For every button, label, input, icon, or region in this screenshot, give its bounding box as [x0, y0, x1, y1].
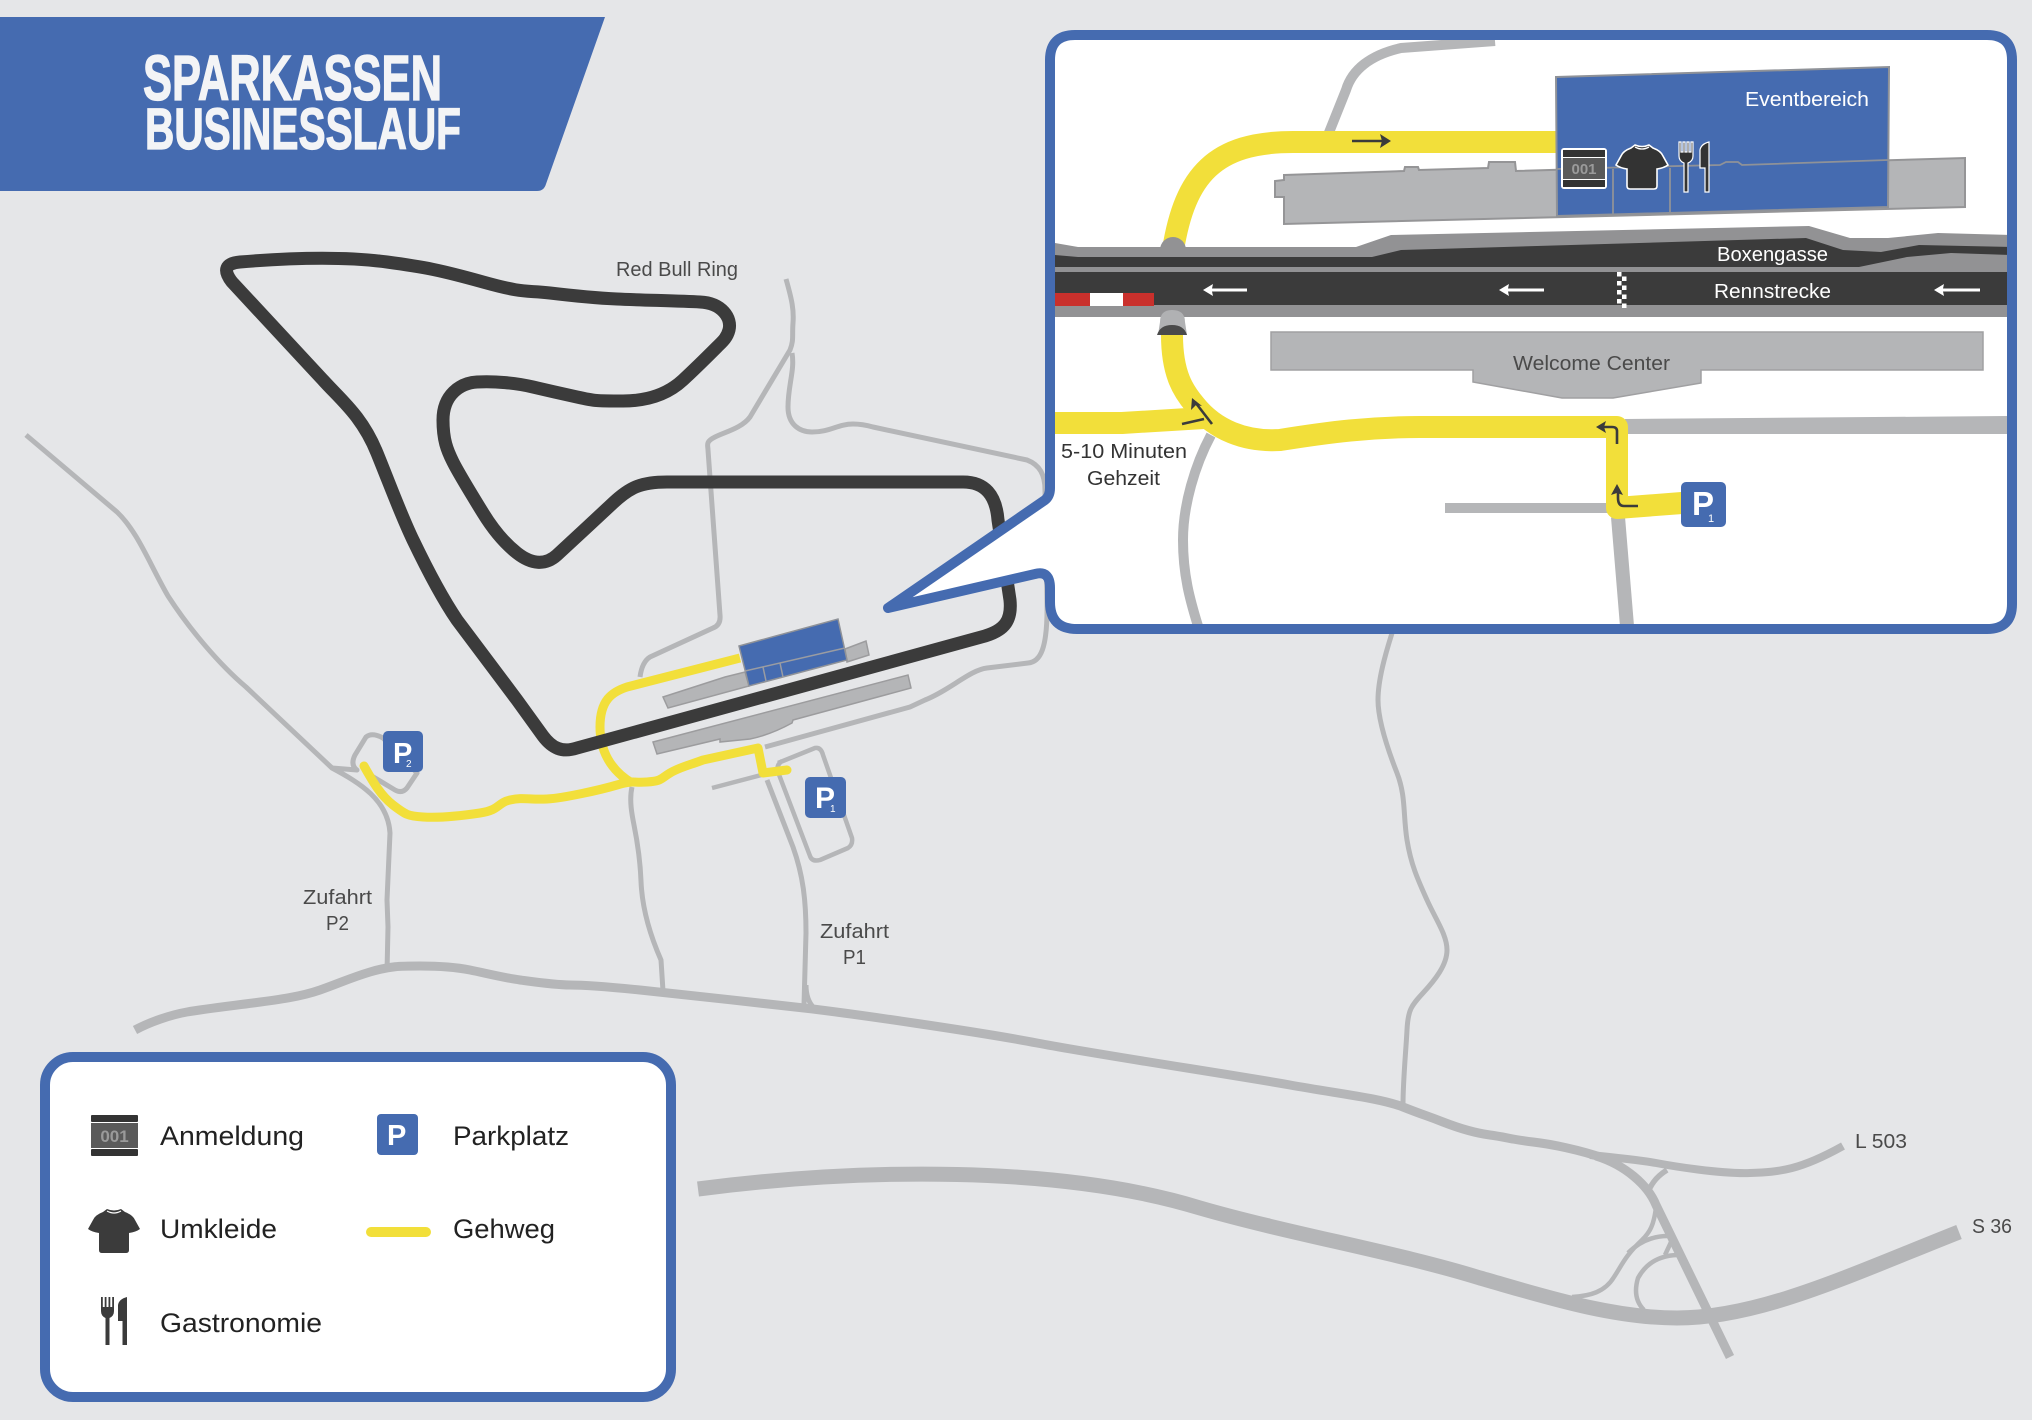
buildings overview [653, 619, 911, 754]
parking icon P1: P [815, 782, 835, 815]
walking time note: 5-10 Minuten [1061, 441, 1187, 463]
map labels [303, 259, 2012, 1238]
event area overview [739, 619, 847, 686]
legend label: Umkleide: Umkleide [160, 1214, 277, 1244]
map labels: P2 [326, 913, 349, 935]
legend icon: shirt [88, 1209, 140, 1253]
grey pavilion building [1275, 158, 1965, 224]
tunnel entrance [1157, 237, 1187, 335]
walkway to event area [1173, 142, 1556, 250]
map labels: S 36 [1972, 1216, 2012, 1238]
legend icon: walkway line [366, 1227, 431, 1237]
race track strip: Rennstrecke [1714, 281, 1831, 303]
parking icon P2: 2 [406, 759, 412, 770]
white direction arrows [1203, 284, 1980, 296]
title banner: SPARKASSEN [143, 42, 442, 114]
inset detail panel with callout pointer [888, 35, 2012, 629]
walking time note: Gehzeit [1087, 468, 1160, 490]
map labels: Red Bull Ring [616, 259, 738, 281]
map labels: L 503 [1855, 1131, 1907, 1153]
legend label: Anmeldung: Anmeldung [160, 1121, 304, 1151]
parking icon P2: P [393, 738, 412, 770]
welcome center building [1271, 332, 1983, 398]
event area [1556, 67, 1889, 216]
legend icon: parking [377, 1114, 418, 1155]
legend label: Gehweg: Gehweg [453, 1214, 555, 1244]
pit lane: Boxengasse [1717, 244, 1828, 266]
welcome center building: Welcome Center [1513, 353, 1670, 375]
title banner: BUSINESSLAUF [145, 97, 461, 162]
walking time note [1062, 443, 1186, 485]
race track strip [1055, 272, 2010, 317]
footpath overview [364, 658, 787, 817]
icon: cutlery [1679, 142, 1709, 192]
parking icon inset [1681, 482, 1726, 527]
parking icon inset: P [1692, 485, 1714, 522]
legend icon: registration bib [91, 1115, 138, 1156]
event area: Eventbereich [1745, 89, 1869, 111]
parking icon P1: 1 [830, 804, 836, 815]
icon: registration bib: 001 [1571, 161, 1597, 178]
race track: Red Bull Ring [227, 258, 1010, 750]
footpath to parking P1 [1055, 335, 1682, 508]
inset roads [1183, 41, 2010, 626]
parking icon P2 [383, 731, 423, 772]
road network [26, 279, 1959, 1357]
icon: shirt [1616, 145, 1668, 189]
legend label: Gastronomie: Gastronomie [160, 1308, 322, 1338]
pit lane [1055, 226, 2010, 274]
title banner [0, 17, 605, 191]
map labels: Zufahrt [303, 887, 372, 909]
legend label: Parkplatz: Parkplatz [453, 1121, 569, 1151]
map labels: P1 [843, 947, 866, 969]
legend icon: registration bib: 001 [100, 1127, 129, 1146]
parking icon P1 [805, 777, 846, 818]
map labels: Zufahrt [820, 921, 889, 943]
icon: registration bib [1561, 148, 1607, 189]
dark route arrows [1182, 134, 1638, 506]
legend icon: cutlery [101, 1297, 127, 1345]
parking icon inset: 1 [1708, 513, 1714, 525]
legend panel [45, 1057, 671, 1397]
legend icon: parking: P [387, 1120, 406, 1152]
